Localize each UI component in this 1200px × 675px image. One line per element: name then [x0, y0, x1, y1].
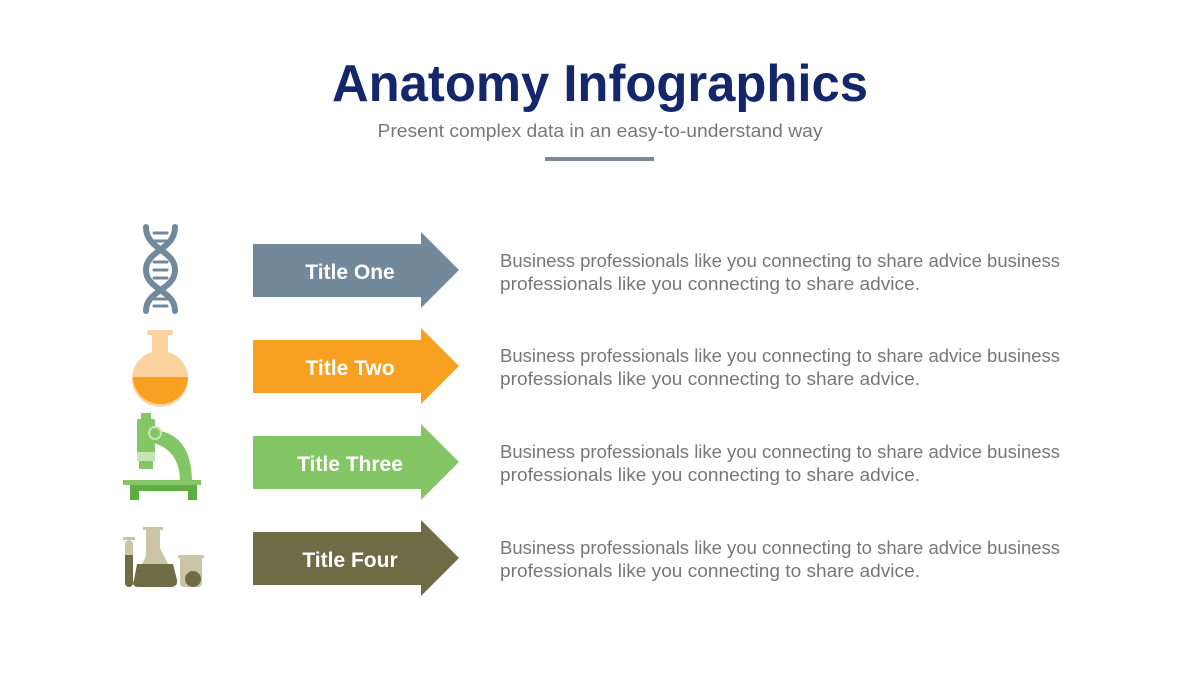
- text block 3: Business professionals like you connecting to share advice business: [500, 442, 1060, 462]
- text block 2: Business professionals like you connecting to share advice business: [500, 346, 1060, 366]
- text block 4: professionals like you connecting to share advice.: [500, 561, 920, 581]
- text block 2: professionals like you connecting to share advice.: [500, 369, 920, 389]
- title: Anatomy Infographics: [332, 55, 868, 113]
- text block 1: professionals like you connecting to share advice.: [500, 274, 920, 294]
- arrow: Title Two: [253, 328, 459, 404]
- arrow: Title Four: Title Four: [302, 549, 398, 572]
- text block 1: Business professionals like you connecting to share advice business: [500, 251, 1060, 271]
- icon: flask: [132, 330, 188, 407]
- text block 3: [500, 442, 1060, 485]
- icon: microscope: [123, 413, 201, 500]
- text block 4: Business professionals like you connecting to share advice business: [500, 538, 1060, 558]
- arrow: Title Four: [253, 520, 459, 596]
- arrow: Title Three: [253, 424, 459, 500]
- icon: DNA: [146, 227, 175, 311]
- text block 1: [500, 251, 1060, 294]
- text block 3: professionals like you connecting to share advice.: [500, 465, 920, 485]
- arrow: Title Two: Title Two: [305, 357, 395, 380]
- text block 2: [500, 346, 1060, 389]
- icon: lab glassware: [123, 527, 204, 587]
- arrow: Title Three: Title Three: [297, 453, 403, 476]
- arrow: Title One: [253, 232, 459, 308]
- text block 4: [500, 538, 1060, 581]
- subtitle: Present complex data in an easy-to-understand way: [378, 121, 822, 141]
- arrow: Title One: Title One: [305, 261, 395, 284]
